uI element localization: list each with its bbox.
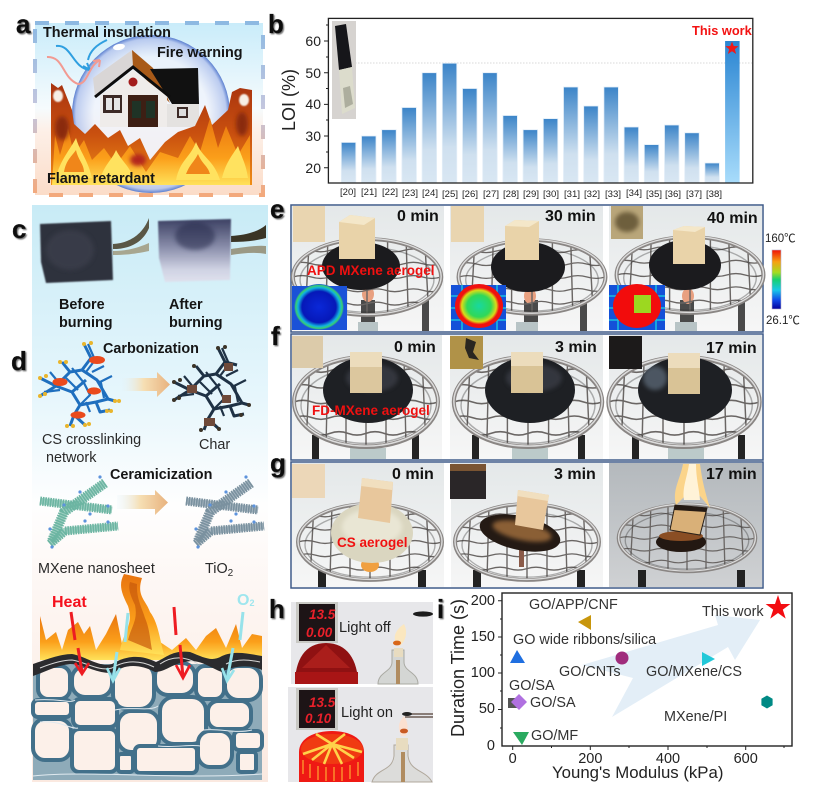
photo g3: 17 min with flame	[609, 463, 762, 587]
label e: e	[270, 194, 284, 224]
surface flames	[40, 574, 262, 660]
photo: light on	[288, 687, 433, 782]
x axis title: Young's Modulus (kPa)	[552, 763, 723, 782]
time labels panel f: 0 min	[394, 339, 436, 356]
left column background	[32, 205, 268, 782]
photo: light on: 0.10	[305, 711, 332, 726]
x axis reference labels: [22]	[382, 187, 398, 198]
text: char: Char	[199, 437, 230, 453]
inset photo: burned sample	[332, 21, 356, 119]
time labels panel g: 3 min	[554, 466, 596, 483]
x axis reference labels: [26]	[462, 189, 478, 200]
photo f3: 17 min	[608, 335, 762, 459]
x axis reference labels: [36]	[665, 189, 681, 200]
point labels: GO/MXene/CS	[646, 664, 742, 680]
marker: GO/MF	[513, 732, 529, 745]
text: oxygen: 2	[249, 598, 254, 608]
arrow: oxygen 2	[222, 612, 243, 681]
panel c and d: left column	[11, 205, 268, 782]
flames around the house	[51, 83, 252, 185]
text: fire warning: Fire warning	[157, 45, 243, 61]
photo f2: 3 min	[450, 335, 603, 459]
y axis numbers	[305, 33, 321, 176]
point labels	[509, 597, 764, 744]
text: thermal insulation: Thermal insulation	[43, 25, 171, 41]
photo: light on: Light on	[341, 705, 393, 721]
y axis numbers: 50	[305, 65, 321, 81]
label f: f	[271, 321, 280, 351]
chart frame	[328, 18, 753, 183]
photo f1: 0 min	[292, 335, 442, 459]
x axis reference labels: [28]	[503, 189, 519, 200]
x axis numbers: 200	[578, 751, 602, 767]
point labels: GO/MF	[531, 728, 578, 744]
marker: GO/CNTs	[616, 652, 628, 664]
text: after burning: After	[169, 297, 203, 313]
label d: d	[11, 346, 27, 376]
arrow: ceramicization	[117, 490, 168, 515]
y axis numbers: 200	[471, 593, 495, 609]
panel f: FD-MXene aerogel	[291, 334, 763, 460]
time labels panel g: 0 min	[392, 466, 434, 483]
x axis reference labels: [37]	[686, 189, 702, 200]
panel g frame	[291, 462, 763, 588]
panel i: duration vs modulus scatter	[448, 593, 792, 782]
x axis reference labels: [30]	[543, 189, 559, 200]
panel a background with dashed frame	[35, 23, 263, 195]
marker: GO/SA square	[508, 698, 518, 708]
y axis numbers: 0	[487, 738, 495, 754]
marker: this work star	[766, 595, 790, 619]
text: flame retardant: Flame retardant	[47, 171, 155, 187]
photo: light off: 13.5	[309, 607, 336, 622]
y axis numbers: 40	[305, 96, 321, 112]
photo g2: 3 min	[450, 463, 603, 587]
arrow: heat 1	[71, 612, 89, 674]
text: heat: Heat	[52, 594, 87, 611]
marker: GO wide ribbons/silica	[510, 650, 525, 663]
text: ceramicization: Ceramicization	[110, 467, 212, 483]
photo e3: 40 min	[609, 206, 763, 331]
marker: MXene/PI	[761, 696, 773, 708]
text: after burning: burning	[169, 315, 223, 331]
panel e frame	[291, 205, 763, 332]
panel f frame	[291, 334, 763, 460]
label i: i	[437, 594, 444, 624]
arrow: heat 2	[174, 607, 190, 678]
time labels panel e: 40 min	[707, 210, 758, 227]
x axis reference labels: [31]	[564, 189, 580, 200]
x axis reference labels: [38]	[706, 189, 722, 200]
photo: sample after burning	[158, 219, 266, 282]
y axis numbers	[471, 593, 495, 754]
marker: GO/SA diamond	[511, 694, 527, 710]
x axis reference labels: [24]	[422, 188, 438, 199]
point labels: GO/CNTs	[559, 664, 621, 680]
photo: light off	[291, 602, 433, 684]
text: FD-MXene aerogel: FD-MXene aerogel	[312, 403, 430, 418]
time labels panel e: 30 min	[545, 208, 596, 225]
label a: a	[16, 9, 31, 39]
trend arrow	[582, 615, 760, 717]
photo: sample before burning	[40, 218, 149, 283]
diagram: char network	[172, 345, 251, 432]
colour bar legend	[765, 233, 800, 327]
photo e2: 30 min	[450, 206, 605, 331]
text: MXene nanosheet: MXene nanosheet	[38, 561, 155, 577]
colour bar legend: 160℃	[765, 233, 796, 245]
time labels panel f: 3 min	[555, 339, 597, 356]
text: TiO2: 2	[228, 568, 234, 579]
panel h: light alarm photos	[288, 602, 433, 782]
point labels: GO/SA	[509, 678, 555, 694]
highlighted bar: this work	[725, 41, 740, 183]
x axis numbers: 0	[509, 751, 517, 767]
y axis ticks	[324, 25, 328, 168]
dotted reference line	[355, 62, 752, 64]
point labels: MXene/PI	[664, 709, 727, 725]
text: this work: This work	[692, 23, 753, 38]
photo e1: 0 min	[292, 206, 444, 331]
text: before burning: burning	[59, 315, 113, 331]
y axis numbers: 150	[471, 629, 495, 645]
y axis numbers: 20	[305, 160, 321, 176]
time labels panel g	[392, 466, 757, 483]
protective bubble	[72, 35, 230, 193]
photo: light off: 0.00	[306, 625, 333, 640]
diagram: TiO2 sheet	[186, 475, 264, 549]
text: CS aerogel: CS aerogel	[337, 535, 408, 550]
point labels: GO/APP/CNF	[529, 597, 618, 613]
x axis numbers	[509, 751, 758, 767]
y axis numbers: 30	[305, 128, 321, 144]
point labels: GO/SA	[530, 695, 576, 711]
label b: b	[268, 9, 284, 39]
x axis reference labels: [35]	[646, 189, 662, 200]
y axis numbers: 100	[471, 665, 495, 681]
time labels panel e	[397, 208, 758, 227]
time labels panel f	[394, 339, 757, 357]
arrow: carbonization	[122, 372, 170, 397]
text: CS crosslinking network: network	[46, 450, 97, 466]
panel g: CS aerogel	[291, 462, 763, 588]
heat flow arrows	[47, 40, 107, 84]
text: oxygen: O	[237, 592, 249, 609]
time labels panel f: 17 min	[706, 340, 757, 357]
arrow: oxygen 1	[107, 613, 128, 681]
chart frame	[502, 593, 792, 746]
y axis title: Duration Time (s)	[448, 599, 468, 737]
panel a: fire protection house illustration	[35, 23, 263, 195]
text: before burning: Before	[59, 297, 105, 313]
marker: GO/APP/CNF	[578, 615, 591, 630]
label h: h	[269, 594, 285, 624]
x axis reference labels: [33]	[605, 189, 621, 200]
marker: GO/MXene/CS	[702, 652, 715, 666]
x axis reference labels: [20]	[340, 187, 356, 198]
y axis numbers: 50	[479, 701, 495, 717]
text: carbonization: Carbonization	[103, 341, 199, 357]
diagram: MXene nanosheet	[40, 475, 118, 549]
foam cell structure under fire	[33, 663, 262, 780]
y axis title: LOI (%)	[279, 69, 299, 131]
bars	[341, 63, 719, 183]
time labels panel e: 0 min	[397, 208, 439, 225]
photo: light on: 13.5	[309, 695, 336, 710]
text: CS crosslinking network: CS crosslinking	[42, 432, 141, 448]
x axis reference labels	[340, 187, 722, 200]
charred top crust	[33, 652, 262, 676]
label g: g	[270, 448, 286, 478]
point labels: GO wide ribbons/silica	[513, 632, 656, 648]
house	[93, 50, 199, 127]
panel e: APD MXene aerogel	[291, 205, 763, 332]
x axis reference labels: [27]	[483, 189, 499, 200]
photo: light off: Light off	[339, 620, 392, 636]
x axis reference labels: [21]	[361, 187, 377, 198]
text: APD MXene aerogel: APD MXene aerogel	[307, 263, 435, 278]
point labels: This work	[702, 604, 764, 620]
x axis numbers: 400	[656, 751, 680, 767]
photo g1: 0 min	[292, 463, 444, 587]
axis ticks	[498, 601, 784, 750]
bubble highlight	[113, 43, 125, 51]
label c: c	[12, 214, 26, 244]
x axis reference labels: [25]	[442, 189, 458, 200]
x axis reference labels: [32]	[584, 189, 600, 200]
x axis numbers: 600	[734, 751, 758, 767]
x axis reference labels: [23]	[402, 188, 418, 199]
icon: red star	[725, 42, 739, 54]
y axis numbers: 60	[305, 33, 321, 49]
time labels panel g: 17 min	[706, 466, 757, 483]
panel b: LOI bar chart	[279, 18, 753, 200]
text: TiO2: TiO	[205, 561, 228, 577]
x axis reference labels: [29]	[523, 189, 539, 200]
x axis reference labels: [34]	[626, 188, 642, 199]
diagram: CS crosslinking network	[38, 341, 121, 428]
colour bar legend: 26.1℃	[766, 315, 800, 327]
